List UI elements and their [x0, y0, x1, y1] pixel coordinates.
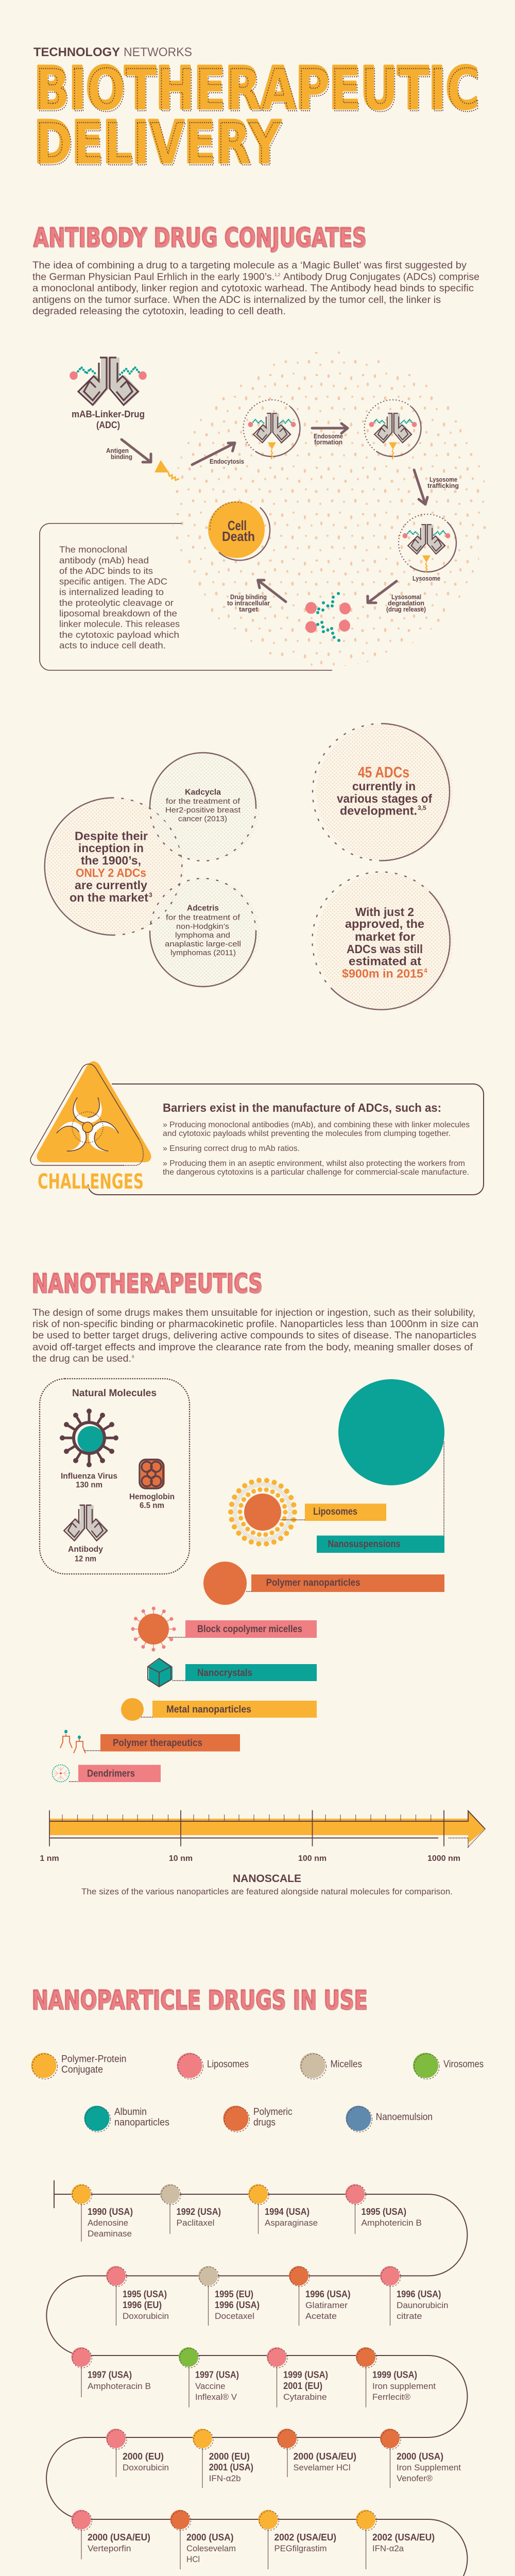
- icon: warning triangle: [30, 1061, 151, 1165]
- 2000 doxorubicin: 2000 (EU): [123, 2451, 164, 2462]
- circle: endosome: [365, 400, 421, 460]
- 1990: [71, 2184, 133, 2242]
- 1996 daunorubicin: [380, 2266, 448, 2326]
- callout: ADC explanation: of the ADC binds to its: [59, 566, 153, 576]
- callout: ADC explanation: antibody (mAb) head: [59, 555, 149, 566]
- section heading: nanoparticle drugs: NANOPARTICLE DRUGS IN USE: [32, 1986, 368, 2016]
- 2000 sevelamer: 2000 (USA/EU): [294, 2451, 356, 2462]
- bar: polymer nanoparticles: [246, 1574, 444, 1592]
- 1999 iron: 1999 (USA): [372, 2370, 417, 2380]
- label: hemoglobin: 6.5 nm: [140, 1501, 164, 1510]
- 1990: 1990 (USA): [88, 2207, 133, 2217]
- circle: Kadcycla: cancer (2013): [178, 815, 227, 823]
- label: ADC: [72, 409, 145, 430]
- stat: only 2 ADCs: on the market: [70, 891, 148, 904]
- 1999 iron: [356, 2347, 436, 2408]
- icon: antigen: [154, 460, 179, 480]
- icon: biohazard: [55, 1097, 121, 1155]
- legend: albumin: Albumin: [114, 2107, 147, 2117]
- 1996 daunorubicin: Daunorubicin: [397, 2300, 448, 2310]
- circle: Adcetris: anaplastic large-cell: [165, 940, 241, 948]
- 2000 iron: Iron Supplement: [397, 2463, 461, 2472]
- legend: virosomes: Virosomes: [443, 2059, 484, 2070]
- bar: liposomes: Liposomes: [313, 1506, 357, 1517]
- icon: antibody: [64, 1505, 109, 1540]
- cell death: Cell: [228, 518, 247, 533]
- timeline: [46, 2180, 474, 2576]
- header: [33, 45, 480, 179]
- scale labels: 1 nm: [40, 1854, 59, 1863]
- arrow: lysosomal degradation: [368, 581, 397, 603]
- title: DELIVERY: [34, 109, 281, 176]
- 2002 IFN: IFN-α2a: [372, 2544, 404, 2553]
- block copolymer micelle: [133, 1608, 174, 1650]
- 1995: 1995 (USA): [362, 2207, 406, 2217]
- stat: only 2 ADCs: are currently: [75, 878, 147, 892]
- 2002 pegfilgrastim: PEGfilgrastim: [274, 2544, 327, 2553]
- legend: micelles: [300, 2053, 362, 2079]
- circle: Kadcycla: Her2-positive breast: [165, 806, 241, 815]
- barriers text: [163, 1101, 470, 1177]
- legend: liposomes: Liposomes: [207, 2059, 249, 2070]
- 1992: Paclitaxel: [176, 2218, 214, 2228]
- stat: 45 ADCs: currently in: [352, 779, 416, 793]
- circle: Adcetris: lymphomas (2011): [170, 948, 236, 957]
- 1994: 1994 (USA): [265, 2207, 310, 2217]
- label: challenges: CHALLENGES: [38, 1170, 144, 1194]
- 1996 glatiramer: [289, 2266, 350, 2326]
- scale labels: [40, 1854, 460, 1863]
- circle: Adcetris: non-Hodgkin’s: [176, 922, 229, 931]
- bar: nanosuspensions: [317, 1535, 444, 1553]
- icon: mAb linker drug: [70, 358, 147, 405]
- heading: Natural Molecules: [72, 1388, 157, 1399]
- cell death: [208, 501, 270, 561]
- circle: Adcetris: lymphoma and: [175, 931, 230, 940]
- nano paragraph: risk of non-specific binding or pharmacokinetic profile. Nanoparticles less than 1000nm in size can: [32, 1319, 478, 1330]
- label: antigen binding: binding: [111, 453, 132, 461]
- bar: block copolymer micelles: [169, 1620, 317, 1638]
- 1995 docetaxel: [198, 2266, 260, 2326]
- 1995: Amphotericin B: [362, 2218, 422, 2228]
- bar: dendrimers: Dendrimers: [87, 1768, 135, 1780]
- scale arrow: [40, 1810, 485, 1863]
- label: lysosomal degradation: (drug release): [386, 606, 426, 613]
- polymer nanoparticle: [203, 1562, 247, 1605]
- stat: 45 ADCs: 3,5: [418, 804, 426, 811]
- arrow: endocytosis: [192, 443, 235, 465]
- metal nanoparticle: [121, 1698, 144, 1721]
- label: antigen binding: [106, 447, 132, 461]
- callout: ADC explanation: is internalized leading to: [59, 587, 164, 597]
- label: endosome formation: formation: [314, 439, 342, 446]
- stat: only 2 ADCs: inception in: [78, 841, 144, 855]
- 1995 docetaxel: 1996 (USA): [215, 2300, 260, 2310]
- label: drug binding: [227, 594, 270, 613]
- callout: ADC explanation: specific antigen. The ADC: [59, 577, 167, 587]
- bar: polymer nanoparticles: Polymer nanoparticles: [266, 1578, 360, 1588]
- 2000 iron: Venofer®: [397, 2473, 433, 2483]
- stat: 45 ADCs: development.: [340, 804, 417, 817]
- bar: metal nanoparticles: Metal nanoparticles: [166, 1704, 251, 1715]
- callout: ADC explanation: the cytotoxic payload which: [59, 630, 179, 640]
- 1995: [345, 2184, 422, 2234]
- icon: hemoglobin: [140, 1460, 165, 1488]
- 1999 iron: Ferrlecit®: [372, 2392, 410, 2402]
- intro paragraph: the German Physician Paul Erhlich in the early 1900’s.: [32, 272, 274, 282]
- label: antibody: [68, 1545, 103, 1564]
- 2000 verteporfin: 2000 (USA/EU): [88, 2532, 150, 2543]
- legend: albumin: [84, 2106, 169, 2132]
- arrow: endosome: [312, 423, 348, 433]
- 2000 colesevelam: Colesevelam: [186, 2544, 236, 2553]
- liposome particle: [231, 1480, 295, 1544]
- 2000 colesevelam: 2000 (USA): [186, 2532, 234, 2543]
- stat: market value: 4: [424, 967, 427, 974]
- chart: nanoparticle sizes: [53, 1379, 444, 1782]
- stat: market value: $900m in 2015: [342, 967, 423, 980]
- circle: Kadcycla: Kadcycla: [185, 788, 221, 796]
- section heading: nanoparticle drugs: NANOPARTICLE DRUGS IN USE: [32, 1986, 368, 2015]
- stat: market value: With just 2: [355, 905, 414, 919]
- stat: 45 ADCs: 45 ADCs: [358, 764, 409, 781]
- 1997 vaccine: 1997 (USA): [195, 2370, 239, 2380]
- stat: only 2 ADCs: ONLY 2 ADCs: [76, 866, 146, 879]
- intro paragraph: [32, 260, 479, 317]
- label: hemoglobin: [129, 1493, 175, 1510]
- circle: lysosome: [399, 514, 456, 572]
- dotted cell field: [172, 351, 487, 667]
- legend: micelles: Micelles: [331, 2059, 362, 2070]
- intro paragraph: Antibody Drug Conjugates (ADCs) comprise: [283, 272, 479, 282]
- bar: nanosuspensions: Nanosuspensions: [328, 1539, 401, 1550]
- nanosuspension particle: [338, 1379, 444, 1535]
- polymer therapeutic icons: [60, 1730, 85, 1753]
- label: influenza: [61, 1472, 117, 1489]
- 2000 verteporfin: [71, 2510, 150, 2560]
- stat: 45 ADCs: [313, 723, 453, 860]
- circle: Kadcycla: [150, 753, 260, 861]
- label: ADC: (ADC): [96, 420, 120, 430]
- barriers text: » Ensuring correct drug to mAb ratios.: [163, 1144, 300, 1153]
- callout: ADC explanation: The monoclonal: [59, 545, 127, 555]
- legend: polymeric: [224, 2106, 293, 2132]
- 1999 cytarabine: 2001 (EU): [283, 2381, 322, 2391]
- 1999 iron: Iron supplement: [372, 2381, 436, 2391]
- 1999 cytarabine: [267, 2347, 328, 2408]
- 2000 IFN: [193, 2429, 253, 2488]
- nano paragraph: [32, 1308, 478, 1364]
- 2000 sevelamer: Sevelamer HCl: [294, 2463, 350, 2472]
- stat: market value: estimated at: [349, 954, 421, 968]
- intro paragraph: The idea of combining a drug to a targeting molecule as a ‘Magic Bullet’ was first suggested by: [32, 260, 467, 271]
- 2000 verteporfin: Verteporfin: [88, 2544, 131, 2553]
- logo: NETWORKS: [124, 45, 192, 59]
- drug release set 2: [305, 620, 350, 642]
- label: lysosome trafficking: Lysosome: [430, 476, 457, 483]
- circle: bound ADC: [244, 400, 300, 460]
- stat: only 2 ADCs: 3: [149, 891, 152, 899]
- legend: polymer-protein: Conjugate: [61, 2064, 103, 2075]
- stat: 45 ADCs: various stages of: [337, 792, 432, 805]
- stat: only 2 ADCs: [45, 798, 184, 935]
- stat: market value: ADCs was still: [347, 942, 423, 956]
- nanoscale caption: NANOSCALE: [233, 1873, 301, 1885]
- legend: liposomes: [177, 2053, 249, 2079]
- section heading: nanotherapeutics: NANOTHERAPEUTICS: [32, 1268, 263, 1299]
- 1999 cytarabine: Cytarabine: [283, 2392, 327, 2402]
- panel: natural molecules: [40, 1379, 190, 1574]
- stat: market value: approved, the: [345, 917, 424, 930]
- 1995 docetaxel: Docetaxel: [215, 2311, 254, 2321]
- circle: Kadcycla: for the treatment of: [166, 797, 241, 806]
- callout: ADC explanation: liposomal breakdown of the: [59, 608, 177, 619]
- section heading: antibody drug conjugates: ANTIBODY DRUG CONJUGATES: [33, 223, 367, 253]
- section heading: antibody drug conjugates: ANTIBODY DRUG CONJUGATES: [34, 224, 367, 254]
- 1994: [248, 2184, 318, 2234]
- label: endosome formation: Endosome: [314, 433, 343, 440]
- 2000 IFN: 2000 (EU): [209, 2451, 250, 2462]
- legend: nanoemulsion: Nanoemulsion: [376, 2112, 433, 2123]
- bar: nanocrystals: Nanocrystals: [197, 1668, 252, 1679]
- nanoscale caption: The sizes of the various nanoparticles are featured alongside natural molecules for comparison.: [81, 1887, 453, 1896]
- barriers text: » Producing them in an aseptic environment, whilst also protecting the workers from: [163, 1159, 465, 1168]
- 2000 colesevelam: HCl: [186, 2554, 200, 2564]
- 2002 pegfilgrastim: [258, 2510, 336, 2569]
- arrow: lysosome trafficking: [414, 470, 427, 504]
- label: drug binding: to intracellular: [227, 600, 270, 607]
- scale labels: 1000 nm: [427, 1854, 460, 1863]
- 1995 doxorubicin: 1995 (USA): [123, 2289, 167, 2299]
- stat: only 2 ADCs: Despite their: [75, 829, 148, 843]
- 2000 IFN: 2001 (USA): [209, 2462, 253, 2472]
- label: antibody: Antibody: [68, 1545, 103, 1554]
- 2000 iron: [380, 2429, 461, 2488]
- 1995 doxorubicin: [106, 2266, 169, 2326]
- 2000 sevelamer: [277, 2429, 356, 2477]
- 2000 doxorubicin: Doxorubicin: [123, 2463, 169, 2472]
- callout: ADC explanation: linker molecule. This releases: [59, 619, 180, 629]
- box outline: [88, 1084, 484, 1195]
- arrow: drug binding: [258, 580, 286, 602]
- intro paragraph: a monoclonal antibody, linker region and cytotoxic warhead. The Antibody head binds to specific: [32, 283, 474, 294]
- label: endosome formation: [314, 433, 343, 446]
- nano paragraph: be used to better target drugs, delivering active compounds to sites of disease. The nanoparticles: [32, 1330, 476, 1341]
- intro paragraph: degraded releasing the cytotoxin, leading to cell death.: [32, 306, 286, 317]
- 1996 glatiramer: 1996 (USA): [305, 2289, 350, 2299]
- 1995 doxorubicin: Doxorubicin: [123, 2311, 169, 2321]
- label: drug binding: Drug binding: [230, 594, 267, 601]
- 1997 vaccine: Inflexal® V: [195, 2392, 237, 2402]
- panel: challenges: [30, 1061, 484, 1195]
- bar: polymer therapeutics: Polymer therapeutics: [113, 1738, 202, 1749]
- drug release set 1: [305, 592, 351, 614]
- barriers text: and cytotoxic payloads whilst preventing the molecules from clumping together.: [163, 1129, 451, 1138]
- circle: Adcetris: Adcetris: [187, 904, 219, 913]
- nanocrystal: [148, 1658, 173, 1687]
- 2000 colesevelam: [170, 2510, 236, 2569]
- barriers text: the dangerous cytotoxins is a particular challenge for commercial-scale manufacture.: [163, 1168, 469, 1177]
- logo: TECHNOLOGY: [33, 45, 120, 59]
- logo: [33, 45, 192, 59]
- bar: metal nanoparticles: [141, 1701, 317, 1718]
- 1997 amphoteracin: [71, 2347, 151, 2397]
- nano paragraph: The design of some drugs makes them unsuitable for injection or ingestion, such as their solubility,: [32, 1308, 475, 1318]
- callout: ADC explanation: the proteolytic cleavage or: [59, 598, 174, 608]
- legend: nanoemulsion: [346, 2106, 433, 2132]
- 1996 glatiramer: Glatiramer: [305, 2300, 348, 2310]
- label: influenza: 130 nm: [76, 1481, 102, 1489]
- intro paragraph: antigens on the tumor surface. When the ADC is internalized by the tumor cell, the linker is: [32, 295, 441, 306]
- barriers text: » Producing monoclonal antibodies (mAb), and combining these with linker molecules: [163, 1121, 470, 1129]
- timeline path: [46, 2180, 474, 2576]
- label: lysosome trafficking: [427, 476, 459, 489]
- 2002 IFN: [356, 2510, 435, 2569]
- 1995 docetaxel: 1995 (EU): [215, 2289, 253, 2299]
- bar: polymer therapeutics: [84, 1734, 240, 1752]
- cell death: Death: [222, 529, 255, 544]
- callout: ADC explanation: [40, 523, 332, 670]
- 1999 cytarabine: 1999 (USA): [283, 2370, 328, 2380]
- legend: albumin: nanoparticles: [114, 2117, 169, 2128]
- legend: polymer-protein: Polymer-Protein: [61, 2054, 127, 2065]
- scale labels: 100 nm: [298, 1854, 327, 1863]
- legend: [31, 2053, 484, 2132]
- icon: influenza virus: [60, 1409, 118, 1467]
- label: antigen binding: Antigen: [106, 447, 129, 454]
- stat: market value: market for: [355, 930, 415, 943]
- legend: polymeric: drugs: [253, 2117, 276, 2128]
- 1996 daunorubicin: 1996 (USA): [397, 2289, 441, 2299]
- label: antibody: 12 nm: [75, 1555, 96, 1564]
- bar: dendrimers: [69, 1765, 161, 1782]
- barriers text: Barriers exist in the manufacture of ADCs, such as:: [163, 1101, 441, 1114]
- nanoscale caption: [81, 1873, 453, 1896]
- nano paragraph: 6: [132, 1354, 134, 1359]
- scale labels: 10 nm: [169, 1854, 193, 1863]
- 1997 vaccine: Vaccine: [195, 2381, 226, 2391]
- 2002 IFN: 2002 (USA/EU): [372, 2532, 435, 2543]
- label: lysosomal degradation: Lysosomal: [391, 594, 421, 601]
- 1996 glatiramer: Acetate: [305, 2311, 337, 2321]
- label: endocytosis: Endocytosis: [210, 458, 244, 465]
- 1992: [160, 2184, 221, 2234]
- circle: Adcetris: for the treatment of: [166, 913, 241, 922]
- label: lysosomal degradation: degradation: [388, 600, 424, 607]
- 1994: Asparaginase: [265, 2218, 318, 2228]
- 1992: 1992 (USA): [176, 2207, 221, 2217]
- diagram: ADC mechanism: [70, 351, 487, 667]
- bar: block copolymer micelles: Block copolymer micelles: [197, 1624, 302, 1635]
- 2000 IFN: IFN-α2b: [209, 2473, 241, 2483]
- dendrimer icon: [53, 1765, 69, 1782]
- label: hemoglobin: Hemoglobin: [129, 1493, 175, 1501]
- circle: Adcetris: [150, 878, 260, 987]
- stat: only 2 ADCs: the 1900’s,: [81, 854, 141, 867]
- label: lysosomal degradation: [386, 594, 426, 613]
- section heading: nanotherapeutics: NANOTHERAPEUTICS: [32, 1269, 263, 1300]
- 1990: Deaminase: [88, 2229, 132, 2239]
- 2000 doxorubicin: [106, 2429, 169, 2477]
- label: ADC: mAB-Linker-Drug: [72, 409, 145, 419]
- legend: polymeric: Polymeric: [253, 2107, 293, 2117]
- nano paragraph: avoid off-target effects and improve the clearance rate from the body, meaning smaller doses of: [32, 1342, 473, 1353]
- bar: nanocrystals: [173, 1664, 317, 1681]
- title: [34, 55, 480, 179]
- 1997 amphoteracin: 1997 (USA): [88, 2370, 132, 2380]
- label: lysosome: Lysosome: [413, 575, 440, 582]
- legend: virosomes: [413, 2053, 484, 2079]
- legend: polymer-protein: [31, 2053, 127, 2079]
- 1995 doxorubicin: 1996 (EU): [123, 2300, 162, 2310]
- bar: liposomes: [281, 1503, 386, 1521]
- intro paragraph: 1,2: [274, 273, 281, 277]
- label: lysosome trafficking: trafficking: [427, 482, 459, 489]
- 1996 daunorubicin: citrate: [397, 2311, 422, 2321]
- label: influenza: Influenza Virus: [61, 1472, 117, 1481]
- arrow: antigen binding: [122, 439, 151, 462]
- 1997 amphoteracin: Amphoteracin B: [88, 2381, 151, 2391]
- title: DELIVERY: [36, 112, 283, 179]
- nano paragraph: the drug can be used.: [32, 1353, 131, 1364]
- 2002 pegfilgrastim: 2002 (USA/EU): [274, 2532, 336, 2543]
- stat: market value: [312, 872, 453, 1010]
- 1990: Adenosine: [88, 2218, 128, 2228]
- 1997 vaccine: [179, 2347, 239, 2408]
- callout: ADC explanation: acts to induce cell death.: [59, 640, 166, 650]
- 2000 iron: 2000 (USA): [397, 2451, 443, 2462]
- label: drug binding: target: [239, 606, 259, 613]
